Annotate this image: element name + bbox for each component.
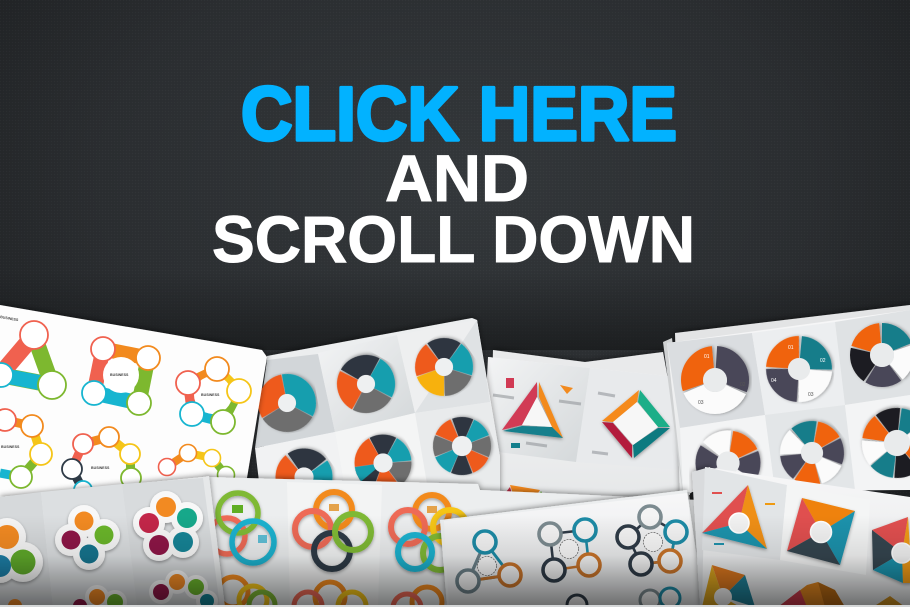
- donut: eight sections: [870, 416, 910, 470]
- bottom light strip: [0, 605, 910, 607]
- label: business: BUSINESS: [1, 445, 20, 449]
- circles: middle group: [55, 505, 120, 570]
- donut: four sections: [775, 345, 823, 393]
- circles: left group: [0, 518, 43, 583]
- sheet: triangle and diamond diagrams: [480, 350, 690, 512]
- label: business: BUSINESS: [201, 393, 220, 397]
- icon: teal tap: [511, 443, 520, 448]
- donut: 8 segments: [437, 421, 487, 471]
- numbers on donuts: 01: [788, 345, 794, 351]
- diagram: folded pentagon: [872, 517, 910, 583]
- diagram: three nodes: [0, 321, 66, 399]
- numbers on donuts: 04: [771, 378, 777, 384]
- sheet: node polygons: [440, 490, 704, 607]
- label: business: BUSINESS: [110, 373, 129, 377]
- sheet: 3d circles: [0, 476, 225, 607]
- numbers on donuts: 03: [808, 392, 814, 398]
- icon: bar chart: [506, 378, 514, 388]
- diagram: triangle of nodes: [457, 531, 521, 592]
- diagram: lower folded shapes: [702, 565, 905, 607]
- donut: six sections: [697, 432, 759, 494]
- text lines near triangle: [493, 393, 615, 454]
- numbers on donuts: 02: [820, 358, 826, 364]
- diagram: five nodes: [176, 357, 251, 434]
- icon: orange hand: [560, 385, 573, 394]
- diagram: lower nodes: [567, 588, 680, 607]
- donut holes: [278, 358, 472, 486]
- diagram: pentagon of nodes: [617, 506, 687, 575]
- labels on rings: [232, 504, 437, 543]
- circles: lower row: [8, 570, 218, 607]
- diagram: four nodes: [82, 337, 160, 415]
- sheet: folded polygon diagrams: [692, 467, 910, 607]
- donut: five sections: [860, 333, 904, 377]
- diagram: triangle: [502, 382, 563, 438]
- title: click here and scroll down: [212, 72, 695, 276]
- diagram: folded square: [787, 498, 855, 565]
- diagram: diamond: [602, 390, 670, 458]
- rings: three: [209, 493, 274, 563]
- diagram: folded triangle: [702, 485, 767, 549]
- sheet: metaball diagrams: [0, 305, 267, 510]
- numbers on donuts: [698, 345, 826, 406]
- donut: 3 segments: [265, 381, 309, 425]
- sheet: segmented rings: [663, 305, 910, 500]
- donut: partial: [278, 451, 330, 503]
- rings: five: [391, 495, 467, 570]
- labels: orange and teal notes: [712, 492, 775, 545]
- donut: seven sections: [782, 423, 842, 483]
- sheet: donut diagrams: [255, 318, 500, 503]
- heading: scroll down: SCROLL DOWN: [212, 202, 695, 276]
- donut: three sections: [692, 357, 738, 403]
- heading: and: AND: [385, 141, 529, 215]
- circles: right group: [133, 491, 203, 561]
- diagram: six nodes: [62, 427, 141, 499]
- donut: 7 segments: [357, 437, 409, 489]
- label: business corner: BUSINESS: [0, 315, 19, 322]
- donut holes: [703, 343, 910, 474]
- donut: 5 segments: [418, 341, 470, 393]
- sheet: interlocking rings: [207, 477, 700, 607]
- diagram: nodes partial: [158, 444, 234, 484]
- rings: lower row: [218, 577, 442, 607]
- numbers on donuts: 02: [740, 382, 746, 388]
- label: business: BUSINESS: [91, 466, 110, 470]
- rings: four: [295, 492, 371, 569]
- heading: click here: CLICK HERE: [241, 72, 677, 157]
- diagram: square of nodes: [539, 519, 600, 581]
- numbers on donuts: 03: [698, 400, 704, 406]
- bottom fade over sheets: [0, 515, 910, 605]
- diagram: five nodes left: [0, 409, 52, 488]
- diagram: partial hexagon: [492, 485, 548, 512]
- donut: 4 segments: [340, 358, 392, 410]
- numbers on donuts: 01: [704, 354, 710, 360]
